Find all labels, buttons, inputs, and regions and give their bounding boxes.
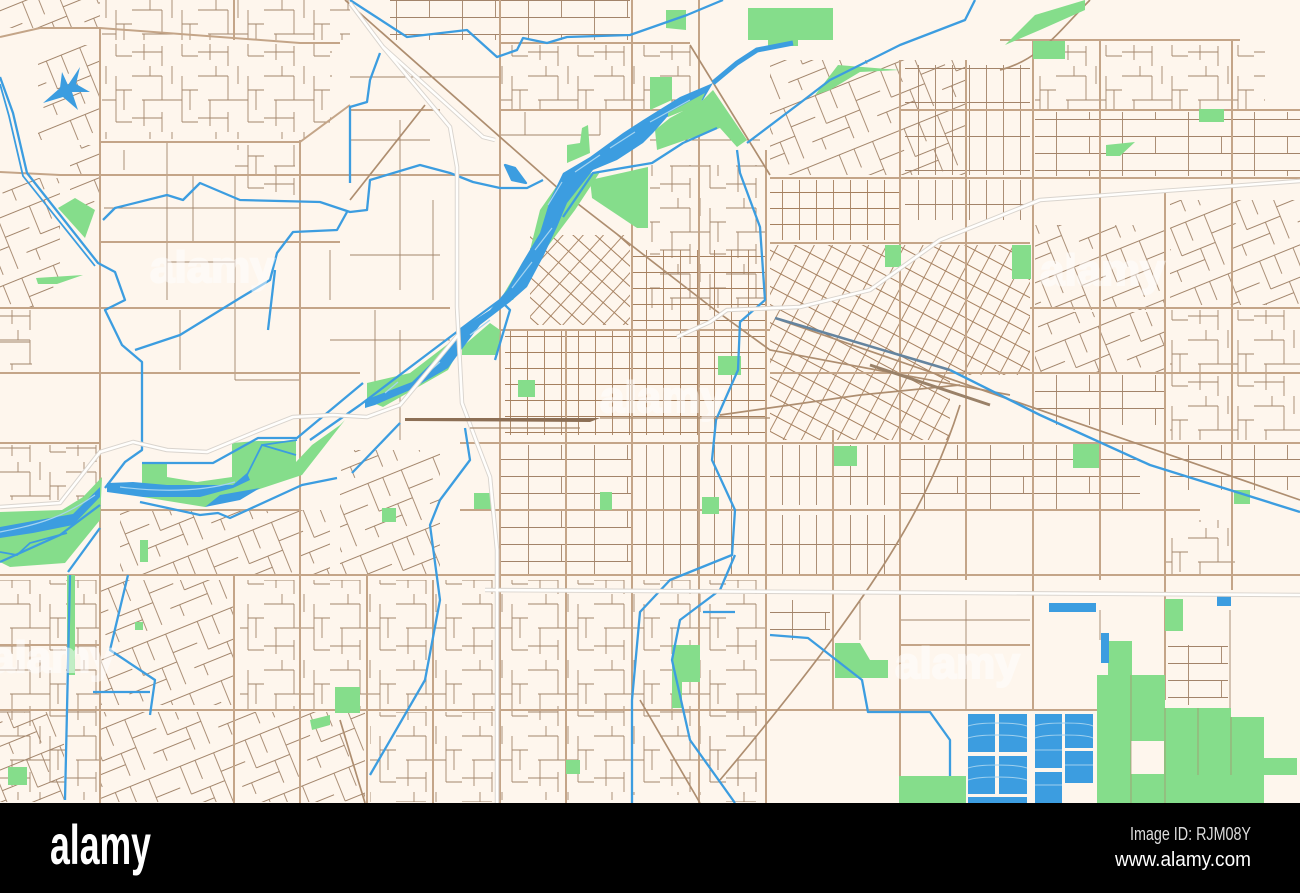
footer bar	[0, 803, 1300, 893]
image id: Image ID: RJM08Y	[1130, 824, 1251, 844]
watermark text: alamy	[895, 639, 1020, 688]
watermark text: alamy	[1040, 246, 1165, 295]
white field gaps and field dividers	[1131, 675, 1231, 803]
field furrow lines	[968, 723, 1093, 785]
watermark text	[0, 243, 1165, 688]
footer logo: alamy	[50, 813, 151, 876]
watermark text: alamy	[600, 373, 725, 422]
irrigated blue fields	[968, 596, 1231, 803]
watermark text: alamy	[150, 243, 275, 292]
diagonal roads and rail corridors	[340, 0, 1300, 803]
rail yard	[405, 365, 990, 428]
sparse area streets	[0, 77, 1230, 710]
main river	[0, 43, 793, 555]
website: www.alamy.com	[1114, 849, 1251, 871]
lake with branching inlets	[43, 67, 90, 110]
